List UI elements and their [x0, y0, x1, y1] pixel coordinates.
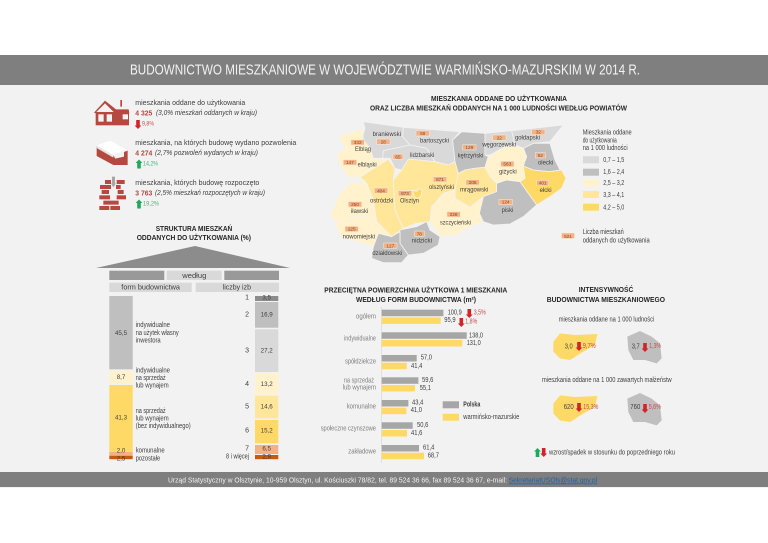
- footer band: SekretariatUSOls@stat.gov.pl: [509, 476, 597, 484]
- bar chart: 57,0: [421, 355, 432, 362]
- choropleth map of counties: 28: [381, 139, 386, 144]
- bar chart: [321, 307, 486, 463]
- choropleth map of counties: ostródzki: [370, 197, 394, 204]
- bar chart: 55,1: [420, 385, 431, 392]
- stacked bar: number of rooms: 6,5: [262, 446, 272, 453]
- heading: map: MIESZKANIA ODDANE DO UŻYTKOWANIA: [431, 95, 567, 103]
- text: building permits: [135, 140, 296, 168]
- choropleth map of counties: 125: [348, 227, 356, 232]
- stacked bar: forms of construction: na sprzedaż: [136, 408, 166, 415]
- choropleth map of counties: giżycki: [499, 168, 517, 175]
- bar chart: społeczne czynszowe: [321, 426, 376, 433]
- stacked bar: number of rooms: 16,9: [261, 312, 273, 319]
- metric: per 1000 marriages: 760: [630, 404, 640, 411]
- choropleth map of counties: 65: [395, 154, 401, 159]
- choropleth map of counties: węgorzewski: [481, 142, 516, 149]
- stacked bar: number of rooms: 27,2: [261, 348, 273, 355]
- map legend: 2,5 – 3,2: [603, 180, 624, 187]
- text: building permits: 14,2%: [143, 162, 159, 168]
- bar chart: indywidualne: [344, 336, 376, 343]
- choropleth map of counties: piski: [502, 207, 514, 214]
- choropleth map of counties: 129: [465, 145, 474, 150]
- text: dwellings started: (2,5% mieszkań rozpoczętych w kraju): [155, 190, 265, 197]
- metric: per 1000 marriages: 15,3%: [583, 404, 598, 411]
- choropleth map of counties: elbląski: [358, 161, 377, 168]
- column headers: form budownictwa: [121, 283, 181, 292]
- choropleth map of counties: 250: [351, 202, 359, 207]
- stacked bar: number of rooms: 15,2: [261, 428, 273, 435]
- roof shape: [96, 246, 290, 268]
- choropleth map of counties: nidzicki: [412, 238, 432, 245]
- choropleth map of counties: kętrzyński: [458, 153, 484, 160]
- choropleth map of counties: 563: [503, 162, 512, 167]
- choropleth map of counties: olecki: [538, 160, 554, 167]
- panel: key figures: [94, 100, 296, 210]
- metric: per 1000 population: [553, 316, 662, 363]
- choropleth map of counties: 59: [420, 131, 426, 136]
- choropleth map of counties: 124: [502, 200, 510, 205]
- heading: map: ORAZ LICZBA MIESZKAŃ ODDANYCH NA 1 000 LUDNOŚCI WEDŁUG POWIATÓW: [370, 104, 627, 113]
- column headers: liczby izb: [223, 283, 251, 292]
- stacked bar: number of rooms: 2: [245, 312, 249, 319]
- stacked bar: number of rooms: [226, 294, 278, 460]
- icon: house: [94, 100, 129, 125]
- bar chart: 68,7: [428, 452, 439, 459]
- heading: intensity: BUDOWNICTWA MIESZKANIOWEGO: [547, 297, 666, 304]
- stacked bar: number of rooms: 7: [245, 446, 249, 453]
- icon: bricks: [99, 177, 126, 210]
- stacked bar: number of rooms: 4: [245, 381, 249, 388]
- heading: intensity: [547, 285, 666, 304]
- legend: change arrows: wzrost/spadek w stosunku do poprzedniego roku: [548, 449, 675, 456]
- stacked bar: forms of construction: 45,5: [115, 330, 128, 337]
- choropleth map of counties: olsztyński: [429, 184, 454, 191]
- text: dwellings started: 3 763: [135, 190, 152, 197]
- choropleth map of counties: nowomiejski: [343, 233, 375, 240]
- bar chart: lub wynajem: [343, 385, 376, 392]
- map legend: na 1 000 ludności: [583, 145, 628, 152]
- panel: structure of completed dwellings: [96, 224, 290, 463]
- bar chart: zakładowe: [348, 449, 376, 456]
- metric: per 1000 population: 3,7: [632, 343, 640, 350]
- bar chart: 138,0: [469, 332, 483, 339]
- choropleth map of counties: 32: [536, 130, 541, 135]
- footer band: [0, 472, 768, 487]
- choropleth map of counties: 332: [354, 140, 362, 145]
- stacked bar: forms of construction: 2,5: [117, 456, 126, 463]
- stacked bar: number of rooms: 5: [245, 404, 249, 411]
- metric: per 1000 marriages: [542, 377, 672, 425]
- bar chart: 41,4: [411, 363, 422, 370]
- icon: foundation: [97, 141, 128, 165]
- stacked bar: forms of construction: (bez indywidualnego): [136, 423, 191, 430]
- metric: per 1000 population: 3,0: [565, 343, 573, 350]
- bar chart: 100,9: [448, 310, 462, 317]
- text: completed dwellings: (3,0% mieszkań oddanych w kraju): [156, 110, 257, 117]
- choropleth map of counties: mrągowski: [460, 187, 489, 194]
- choropleth map of counties: szczycieński: [440, 219, 471, 226]
- bar chart: spółdzielcze: [345, 359, 376, 366]
- stacked bar: forms of construction: pozostałe: [136, 456, 160, 463]
- choropleth map of counties: gołdapski: [515, 135, 540, 142]
- text: building permits: (2,7% pozwoleń wydanych w kraju): [155, 150, 258, 157]
- text: dwellings started: [135, 180, 265, 208]
- text: dwellings started: 19,2%: [143, 202, 160, 208]
- bar chart: ogółem: [356, 313, 376, 320]
- text: completed dwellings: [135, 100, 257, 129]
- bar chart: 95,9: [444, 317, 456, 324]
- stacked bar: forms of construction: lub wynajem: [136, 382, 169, 389]
- map legend: [562, 130, 650, 245]
- map legend: 521: [564, 234, 572, 239]
- stacked bar: forms of construction: na sprzedaż: [136, 375, 166, 382]
- stacked bar: forms of construction: indywidualne: [136, 368, 170, 375]
- heading: structure: ODDANYCH DO UŻYTKOWANIA (%): [137, 234, 251, 242]
- stacked bar: number of rooms: 3: [245, 348, 249, 355]
- choropleth map of counties: bartoszycki: [420, 137, 449, 144]
- stacked bar: number of rooms: 8 i więcej: [226, 453, 249, 460]
- stacked bar: forms of construction: [109, 296, 191, 463]
- metric: per 1000 marriages: 620: [564, 404, 574, 411]
- choropleth map of counties: lidzbarski: [410, 152, 435, 159]
- bar chart: 50,6: [417, 422, 428, 429]
- map legend: 3,3 – 4,1: [603, 192, 624, 199]
- metric: per 1000 population: mieszkania oddane na 1 000 ludności: [559, 316, 655, 323]
- bar chart: 43,4: [412, 400, 423, 407]
- choropleth map of counties: 228: [450, 212, 458, 217]
- text: completed dwellings: 9,8%: [142, 122, 155, 128]
- stacked bar: forms of construction: 2,0: [117, 447, 126, 454]
- choropleth map of counties: 78: [417, 231, 422, 236]
- choropleth map of counties: ełcki: [540, 187, 552, 194]
- metric: per 1000 marriages: 5,6%: [649, 404, 661, 411]
- stacked bar: forms of construction: indywidualne: [136, 322, 170, 329]
- bar chart: 3,5%: [474, 310, 486, 317]
- choropleth map of counties: 873: [401, 191, 409, 196]
- stacked bar: forms of construction: 8,7: [117, 374, 126, 381]
- text: dwellings started: mieszkania, których budowę rozpoczęto: [135, 180, 259, 187]
- metric: per 1000 population: 9,7%: [583, 343, 596, 350]
- metric: per 1000 marriages: mieszkania oddane na 1 000 zawartych małżeństw: [542, 377, 672, 384]
- choropleth map of counties: 401: [539, 181, 547, 186]
- choropleth map of counties: iławski: [351, 208, 369, 215]
- stacked bar: number of rooms: 3,5: [262, 295, 272, 302]
- bar chart: 41,0: [411, 407, 422, 414]
- metric: per 1000 population: 1,3%: [649, 343, 661, 350]
- stacked bar: number of rooms: 14,6: [261, 404, 273, 411]
- heading: structure: STRUKTURA MIESZKAŃ: [156, 224, 232, 233]
- text: completed dwellings: 4 325: [135, 110, 152, 117]
- bar chart: 59,6: [422, 377, 433, 384]
- map legend: 1,6 – 2,4: [603, 169, 624, 176]
- map legend: 0,7 – 1,5: [603, 157, 624, 164]
- choropleth map of counties: 127: [386, 243, 395, 248]
- bar chart: 1,8%: [465, 318, 477, 325]
- stacked bar: number of rooms: 2,9: [262, 454, 272, 460]
- title band: [0, 55, 768, 85]
- stacked bar: number of rooms: 1: [245, 294, 249, 301]
- heading: intensity: INTENSYWNOŚĆ: [579, 285, 633, 294]
- bar chart: komunalne: [347, 403, 376, 410]
- stacked bar: number of rooms: 6: [245, 428, 249, 435]
- choropleth map of counties: działdowski: [372, 250, 403, 257]
- legend: change arrows: [534, 448, 675, 457]
- stacked bar: forms of construction: 41,3: [115, 414, 128, 422]
- heading: map: [370, 95, 627, 113]
- text: building permits: mieszkania, na których budowę wydano pozwolenia: [135, 140, 296, 147]
- stacked bar: forms of construction: lub wynajem: [136, 416, 169, 423]
- title band: BUDOWNICTWO MIESZKANIOWE W WOJEWÓDZTWIE WARMIŃSKO-MAZURSKIM W 2014 R.: [130, 62, 640, 78]
- choropleth map of counties: 62: [538, 153, 543, 158]
- chart legend: warmińsko-mazurskie: [462, 414, 519, 421]
- map legend: 4,2 – 5,0: [603, 204, 624, 212]
- text: building permits: 4 274: [135, 150, 152, 157]
- map legend: do użytkowania: [583, 138, 617, 144]
- map legend: Mieszkania oddane: [583, 130, 632, 136]
- choropleth map of counties: Olsztyn: [400, 198, 419, 205]
- choropleth map of counties: braniewski: [373, 131, 401, 138]
- bar chart: 61,4: [423, 444, 434, 451]
- column headers: według: [181, 271, 206, 280]
- choropleth map of counties: 671: [436, 177, 444, 182]
- panel: average usable floor area: [321, 286, 519, 463]
- choropleth map of counties: 404: [377, 188, 385, 193]
- stacked bar: forms of construction: inwestora: [136, 338, 161, 345]
- chart legend: Polska: [463, 402, 480, 409]
- stacked bar: forms of construction: na użytek własny: [136, 330, 179, 337]
- bar chart: 41,6: [411, 430, 422, 437]
- choropleth map of counties: 147: [346, 160, 354, 165]
- choropleth map of counties: 22: [497, 135, 502, 140]
- choropleth map of counties: [330, 122, 566, 263]
- footer band: Urząd Statystyczny w Olsztynie, 10-959 Olsztyn, ul. Kościuszki 78/82, tel. 89 524 36 66, fax 89 524 36 67, e-mail:: [168, 476, 507, 484]
- heading: floor area: PRZECIĘTNA POWIERZCHNIA UŻYTKOWA 1 MIESZKANIA: [324, 286, 507, 294]
- bar chart: na sprzedaż: [344, 377, 374, 384]
- stacked bar: forms of construction: komunalne: [136, 448, 165, 455]
- chart legend: [443, 401, 519, 421]
- stacked bar: number of rooms: 13,2: [261, 381, 273, 388]
- text: completed dwellings: mieszkania oddane do użytkowania: [135, 100, 245, 107]
- choropleth map of counties: Elbląg: [355, 146, 371, 153]
- heading: floor area second line: WEDŁUG FORM BUDOWNICTWA (m²): [356, 297, 476, 304]
- heading: structure: [137, 224, 251, 242]
- choropleth map of counties: 205: [469, 180, 477, 185]
- map legend: oddanych do użytkowania: [583, 238, 650, 245]
- map legend: Liczba mieszkań: [583, 229, 624, 236]
- column headers: [109, 271, 279, 292]
- bar chart: 131,0: [467, 340, 481, 347]
- panel: construction intensity: [534, 285, 675, 457]
